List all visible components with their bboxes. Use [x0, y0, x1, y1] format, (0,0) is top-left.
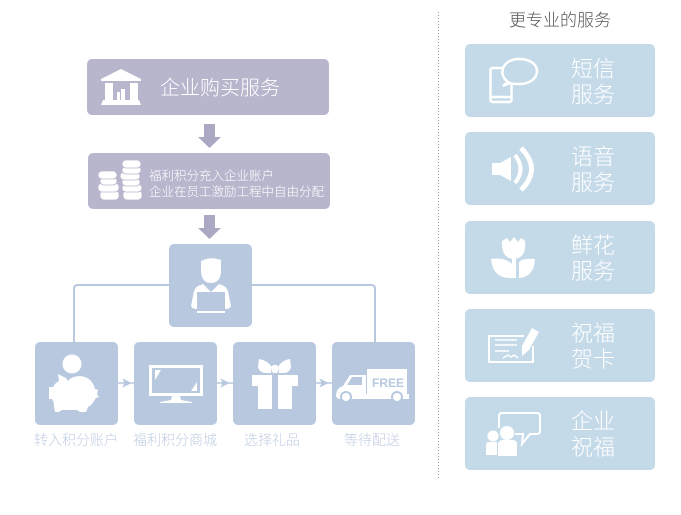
label: choose gift: 选择礼品	[244, 432, 300, 448]
panel: flower service: 服务	[571, 259, 615, 284]
panel: greeting card	[465, 309, 655, 382]
panel: corporate wishes	[465, 397, 655, 470]
panel: flower service	[465, 221, 655, 294]
icon: truck: FREE	[372, 376, 404, 390]
panel: greeting card: 贺卡	[571, 347, 615, 372]
icon: people with speech bubble	[486, 413, 540, 456]
icon: bank	[101, 69, 141, 105]
icon: coins	[98, 160, 142, 200]
panel: transfer points	[34, 342, 118, 448]
icon: employee with laptop	[191, 258, 231, 313]
icon: speaker	[492, 148, 532, 190]
panel: choose gift	[233, 342, 316, 448]
icon: piggy bank	[49, 354, 99, 412]
icon: monitor	[149, 365, 203, 403]
panel: SMS service	[465, 44, 655, 117]
icon: phone with speech bubble	[490, 59, 537, 102]
heading: enterprise purchase: 企业购买服务	[160, 76, 280, 100]
title: more professional services: 更专业的服务	[509, 11, 611, 30]
panel: employee	[169, 244, 252, 327]
connector lines	[74, 285, 375, 342]
icon: gift	[252, 359, 298, 409]
icon: card and pen	[489, 328, 539, 362]
text: corporate wishes: 企业	[571, 409, 615, 434]
panel: enterprise purchase	[87, 59, 329, 115]
panel: points top-up	[88, 153, 330, 209]
panel: SMS service: 服务	[571, 82, 615, 108]
arrow: step 3 to 4	[316, 380, 332, 386]
arrow: step 1 to 2	[118, 380, 134, 386]
text: greeting card: 祝福	[571, 321, 615, 346]
panel: wait for delivery	[332, 342, 415, 448]
divider	[438, 12, 440, 478]
label: points mall: 福利积分商城	[133, 432, 217, 448]
panel: voice service	[465, 132, 655, 205]
panel: corporate wishes: 祝福	[571, 435, 615, 460]
text: voice service: 语音	[571, 144, 615, 170]
text: SMS service: 短信	[571, 56, 615, 82]
label: wait for delivery: 等待配送	[344, 432, 400, 448]
text: points top-up: 福利积分充入企业账户	[149, 169, 274, 183]
arrow: down 1	[198, 124, 221, 148]
label: transfer points: 转入积分账户	[34, 432, 118, 448]
icon: tulip	[491, 237, 535, 278]
text: free allocation: 企业在员工激励工程中自由分配	[149, 185, 325, 199]
panel: points mall	[133, 342, 217, 448]
text: flower service: 鲜花	[571, 233, 615, 258]
panel: voice service: 服务	[571, 170, 615, 196]
arrow: down 2	[198, 215, 221, 239]
arrow: step 2 to 3	[217, 380, 233, 386]
